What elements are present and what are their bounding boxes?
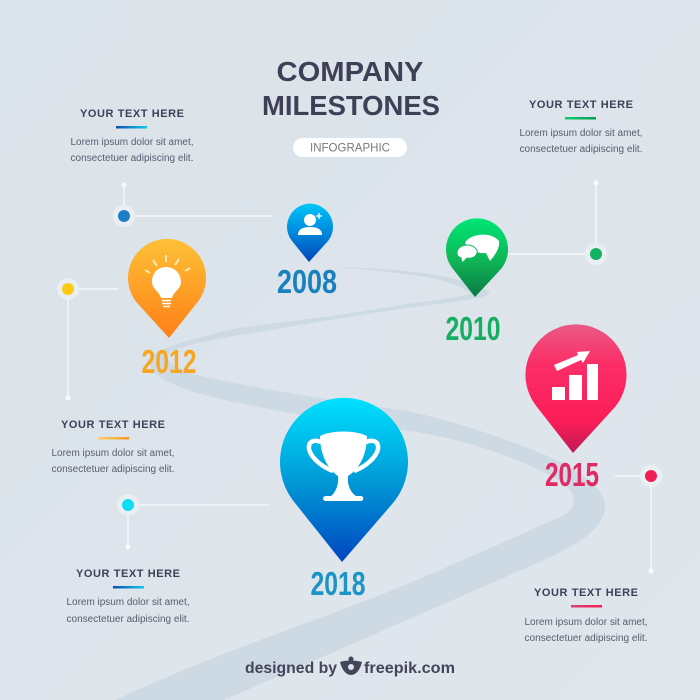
connector: 2008	[113, 182, 272, 227]
pin: 2010 chat icon	[446, 218, 508, 297]
text block: 2018: consectetuer adipiscing elit.	[66, 614, 190, 625]
year: 2008: 2008	[277, 263, 337, 300]
pin: 2008 person icon	[287, 204, 333, 262]
icon: freepik logo	[340, 656, 362, 675]
connector: 2015	[615, 465, 662, 574]
freepik credit	[245, 656, 455, 677]
text block: 2018: Lorem ipsum dolor sit amet,	[66, 597, 190, 608]
text block: 2008: consectetuer adipiscing elit.	[70, 153, 194, 164]
text block: 2010	[520, 99, 642, 155]
text block: 2012: Lorem ipsum dolor sit amet,	[52, 448, 174, 459]
text block: 2012: YOUR TEXT HERE	[61, 419, 165, 431]
text block: 2008: Lorem ipsum dolor sit amet,	[70, 137, 194, 148]
winding road	[116, 267, 605, 700]
text block: 2010: Lorem ipsum dolor sit amet,	[520, 128, 642, 139]
title: COMPANY	[276, 56, 424, 87]
connector: 2012	[57, 278, 118, 400]
freepik credit: designed by	[245, 660, 337, 677]
text block: 2018	[66, 568, 190, 625]
text block: 2010: YOUR TEXT HERE	[529, 99, 633, 111]
connector: 2010	[508, 180, 607, 265]
text block: 2015: Lorem ipsum dolor sit amet,	[524, 617, 648, 628]
connector: 2018	[117, 494, 269, 550]
subtitle pill	[293, 138, 407, 157]
pin: 2015 growth chart icon	[526, 324, 627, 453]
text block: 2010: consectetuer adipiscing elit.	[520, 144, 642, 155]
text block: 2008: YOUR TEXT HERE	[80, 108, 184, 120]
year: 2010: 2010	[446, 310, 500, 347]
text block: 2008	[70, 108, 194, 164]
text block: 2018: YOUR TEXT HERE	[76, 568, 180, 580]
pin: 2012 light bulb icon	[128, 239, 206, 338]
text block: 2012	[52, 419, 174, 475]
text block: 2015	[524, 587, 648, 644]
subtitle pill: INFOGRAPHIC	[310, 140, 390, 154]
year: 2012: 2012	[142, 343, 196, 380]
text block: 2015: YOUR TEXT HERE	[534, 587, 638, 599]
year: 2015: 2015	[545, 456, 599, 493]
title: MILESTONES	[262, 90, 440, 121]
year: 2018: 2018	[310, 565, 366, 602]
text block: 2015: consectetuer adipiscing elit.	[524, 633, 648, 644]
freepik credit: freepik.com	[364, 660, 455, 677]
text block: 2012: consectetuer adipiscing elit.	[52, 464, 174, 475]
title	[262, 56, 440, 121]
pin: 2018 trophy icon	[280, 398, 408, 562]
